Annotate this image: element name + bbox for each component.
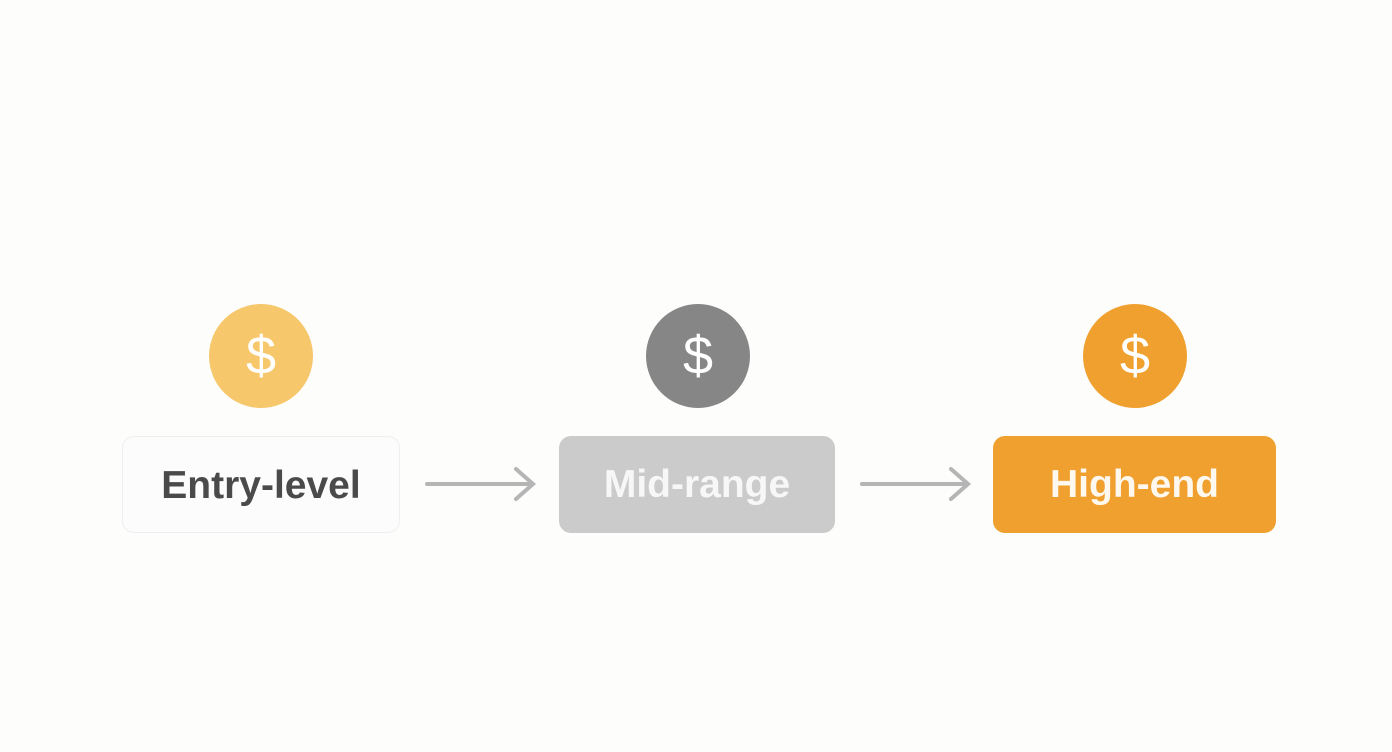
icon: mid-range coin (646, 304, 750, 408)
icon: high-end coin (1083, 304, 1187, 408)
icon: high-end coin: $ (1120, 326, 1150, 386)
panel: high-end: High-end (1050, 463, 1219, 506)
panel: entry-level: Entry-level (161, 464, 361, 507)
arrow: entry to mid (425, 466, 536, 502)
panel: high-end (993, 436, 1276, 533)
icon: mid-range coin: $ (683, 326, 713, 386)
panel: mid-range (559, 436, 835, 533)
icon: entry-level coin (209, 304, 313, 408)
panel: mid-range: Mid-range (604, 463, 790, 506)
panel: entry-level (122, 436, 400, 533)
arrow: mid to high (860, 466, 971, 502)
icon: entry-level coin: $ (246, 326, 276, 386)
